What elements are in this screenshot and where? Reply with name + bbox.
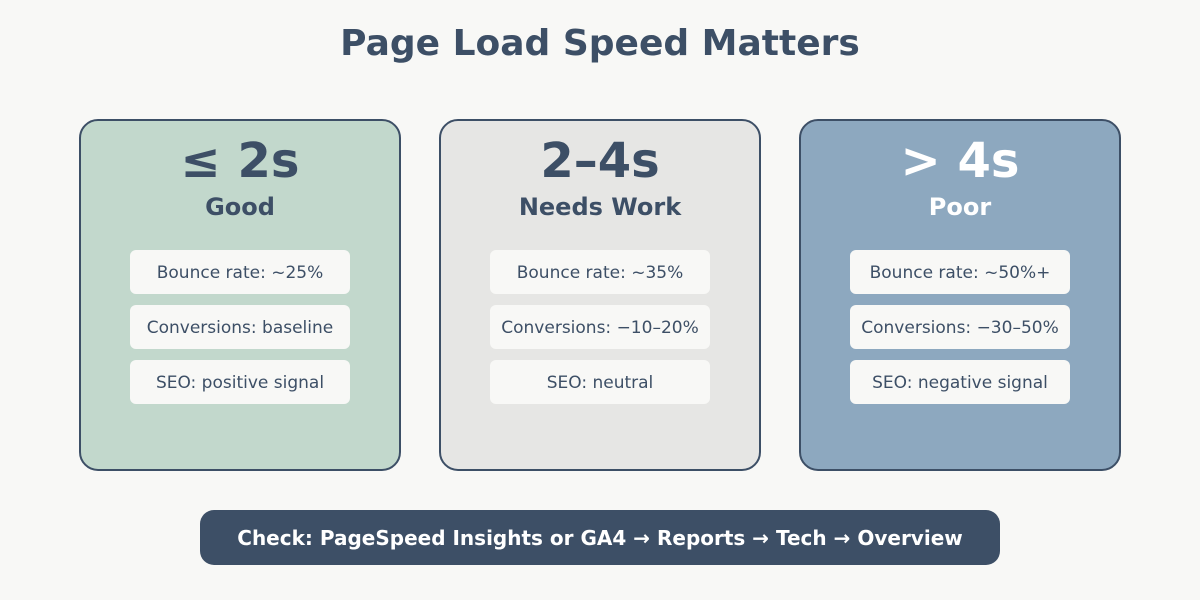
- footer banner: Check: PageSpeed Insights or GA4 → Reports → Tech → Overview: [237, 526, 963, 550]
- pill: conversions: [490, 305, 710, 349]
- pill: bounce: [490, 250, 710, 294]
- pill: conversions: Conversions: baseline: [147, 318, 333, 338]
- pill: conversions: Conversions: −30–50%: [861, 318, 1059, 338]
- subheading: Good: Good: [205, 193, 275, 221]
- pill: conversions: [850, 305, 1070, 349]
- pill: bounce: Bounce rate: ~50%+: [870, 263, 1050, 283]
- pill: seo: [850, 360, 1070, 404]
- pill: conversions: [130, 305, 350, 349]
- pill: conversions: Conversions: −10–20%: [501, 318, 699, 338]
- panel: poor: [800, 120, 1120, 470]
- pill: bounce: [130, 250, 350, 294]
- subheading: Needs Work: Needs Work: [519, 193, 682, 221]
- pill: seo: SEO: positive signal: [156, 373, 324, 393]
- pill: seo: SEO: negative signal: [872, 373, 1048, 393]
- footer banner: [200, 510, 1000, 565]
- panel: needs work: [440, 120, 760, 470]
- pill: seo: [130, 360, 350, 404]
- panel: good: [80, 120, 400, 470]
- pill: seo: SEO: neutral: [547, 373, 653, 393]
- heading: ≤ 2s: ≤ 2s: [181, 133, 299, 189]
- pill: bounce: [850, 250, 1070, 294]
- pill: seo: [490, 360, 710, 404]
- pill: bounce: Bounce rate: ~25%: [157, 263, 323, 283]
- heading: 2–4s: 2–4s: [540, 133, 660, 189]
- heading: > 4s: > 4s: [901, 133, 1019, 189]
- pill: bounce: Bounce rate: ~35%: [517, 263, 683, 283]
- title: Page Load Speed Matters: [340, 23, 860, 64]
- subheading: Poor: Poor: [929, 193, 991, 221]
